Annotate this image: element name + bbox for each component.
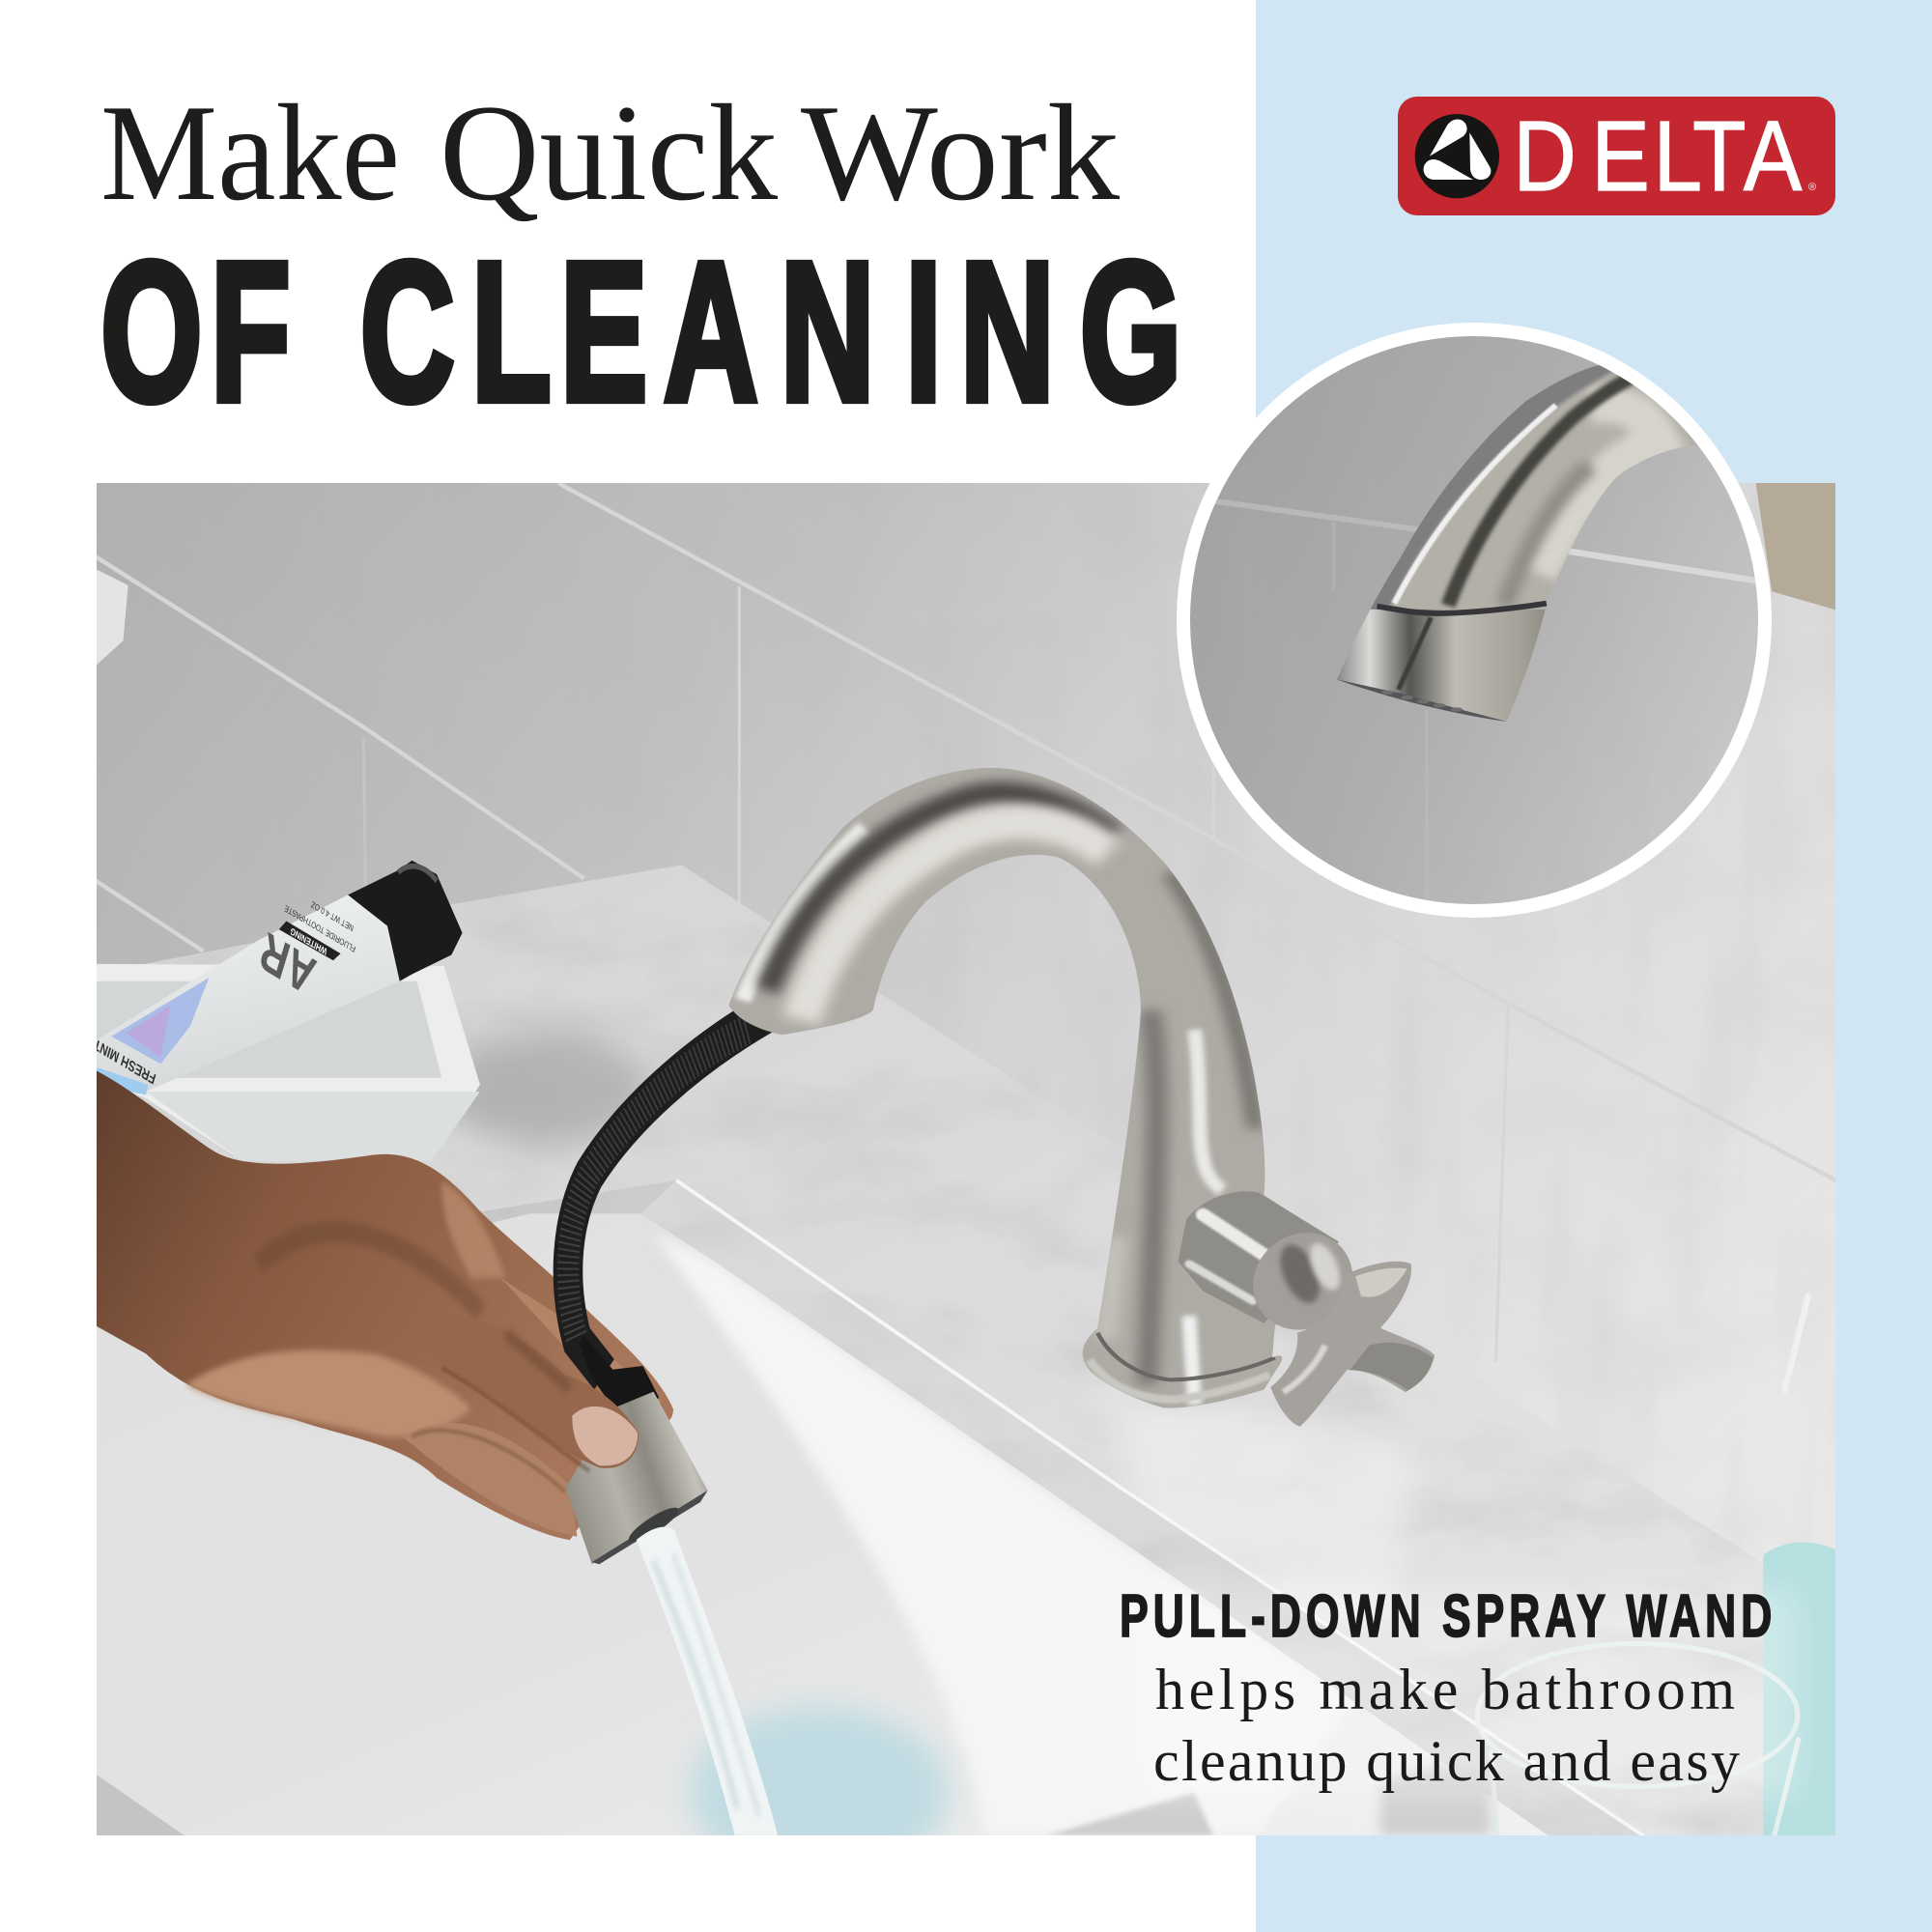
inset circle: spout close-up (1177, 323, 1772, 918)
caption heading: PULL-DOWN SPRAY WAND (1120, 1583, 1772, 1650)
logo mark (1415, 114, 1499, 198)
inset spout (1332, 333, 1719, 725)
counter front lip (640, 1180, 1644, 1836)
water pool tint (680, 1695, 959, 1835)
inset spout seam (1377, 604, 1547, 613)
faucet body (721, 759, 1441, 1424)
dish shadow on counter (438, 1038, 647, 1142)
inset circle: white ring (1177, 323, 1772, 918)
toothpaste tube: FLUORIDE TOOTHPASTE (283, 902, 356, 954)
braided hose (568, 1009, 775, 1409)
logo red badge (1398, 97, 1835, 215)
marble countertop (96, 865, 1836, 1836)
caption (1120, 1583, 1772, 1793)
logo wordmark: DELTA (1513, 100, 1803, 212)
hand with spray wand, dish and toothpaste (92, 861, 778, 1835)
thumb (412, 1317, 639, 1471)
white haze behind caption (1133, 1589, 1799, 1799)
caption line 2: cleanup quick and easy (1153, 1729, 1740, 1793)
spray wand head (566, 1392, 708, 1564)
inset tile lines (1215, 501, 1761, 906)
toothpaste tube: WHITENING (289, 925, 328, 957)
tan shelf, top right (1756, 483, 1836, 610)
background: light blue column (1256, 0, 1932, 1932)
main faucet (721, 759, 1441, 1427)
faucet reflection on counter (1109, 1400, 1410, 1617)
clear bottle, top left (96, 569, 128, 666)
title line: Make Quick Work: Make (100, 76, 400, 229)
handle arm (1178, 1191, 1369, 1343)
photo: faucet at bathroom sink (92, 483, 1836, 1879)
Delta logo (1398, 97, 1835, 215)
caption line 1: helps make bathroom (1155, 1658, 1735, 1721)
hand: palm and fingers (97, 1071, 673, 1540)
toothpaste tube: NET WT 4.0 OZ (310, 899, 355, 933)
glass cup (1477, 1293, 1808, 1836)
title (100, 76, 1181, 442)
water stream (637, 1527, 778, 1835)
inset aerator holes (1381, 691, 1463, 712)
title line: Make Quick Work: Quick (440, 76, 778, 229)
cross handle (1270, 1262, 1435, 1427)
white cup (1380, 1766, 1491, 1836)
title line: OF CLEANING: OF CLEANING (100, 221, 1181, 442)
registered mark: ® (1808, 182, 1816, 193)
title line: Make Quick Work: Work (801, 76, 1121, 229)
water stream details (654, 1554, 759, 1816)
wall tiles (97, 483, 1835, 1563)
soap dish (97, 964, 480, 1160)
toothpaste tube: FRESH MINT (92, 1036, 157, 1088)
teal glass (1763, 1543, 1836, 1836)
toothpaste tube: AR (254, 921, 322, 1006)
toothpaste tube (92, 861, 463, 1095)
sink basin (96, 1213, 1548, 1836)
